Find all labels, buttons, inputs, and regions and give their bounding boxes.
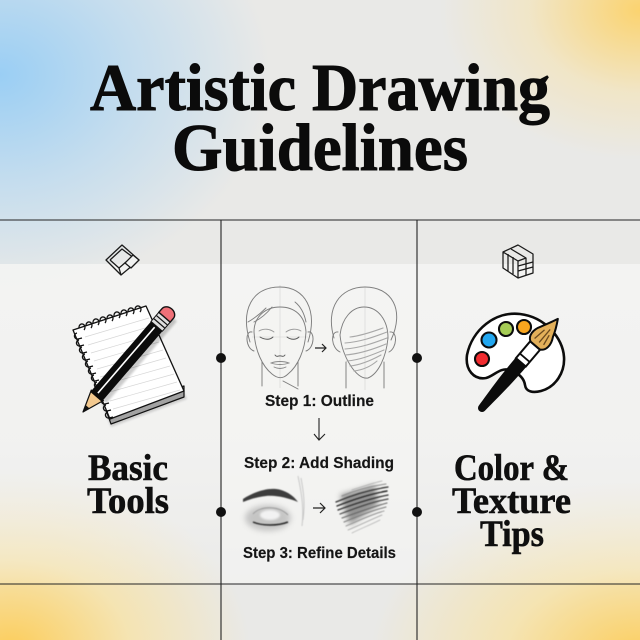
title: Artistic Drawing: [90, 51, 550, 125]
step 1 label: Step 1: Outline: [265, 393, 374, 410]
sketch: eye: [243, 476, 304, 531]
icon: geometric diamond: [106, 245, 139, 275]
panel: basic tools: [73, 304, 187, 522]
panel: steps: [243, 285, 397, 562]
arrow: face to shaded: [315, 344, 326, 352]
heading: color and texture tips: [452, 448, 571, 555]
title: [90, 51, 550, 185]
sketch: shaded head: [331, 287, 397, 390]
step 2 label: Step 2: Add Shading: [244, 455, 394, 472]
heading: color and texture tips: Texture: [452, 481, 571, 522]
step 3 label: Step 3: Refine Details: [243, 545, 396, 562]
heading: basic tools: Tools: [87, 481, 169, 522]
heading: basic tools: [87, 448, 169, 522]
grid node dots: [216, 353, 422, 517]
paintbrush: [471, 312, 566, 418]
icon: palette and brush: [467, 312, 566, 418]
sketch: front face outline: [247, 285, 313, 389]
heading: color and texture tips: Color &: [454, 448, 569, 489]
notebook spiral binding: [74, 306, 141, 418]
pencil: [77, 304, 181, 420]
title: Guidelines: [172, 111, 468, 185]
heading: basic tools: Basic: [88, 448, 168, 489]
icon: isometric cube: [503, 245, 533, 278]
arrow: down: [314, 418, 325, 440]
icon: notebook and pencil: [73, 304, 187, 427]
panel: color and texture: [452, 312, 571, 555]
sketch: pencil shading swatch: [336, 481, 388, 533]
heading: color and texture tips: Tips: [480, 514, 544, 555]
arrow: eye to shading: [313, 503, 325, 513]
